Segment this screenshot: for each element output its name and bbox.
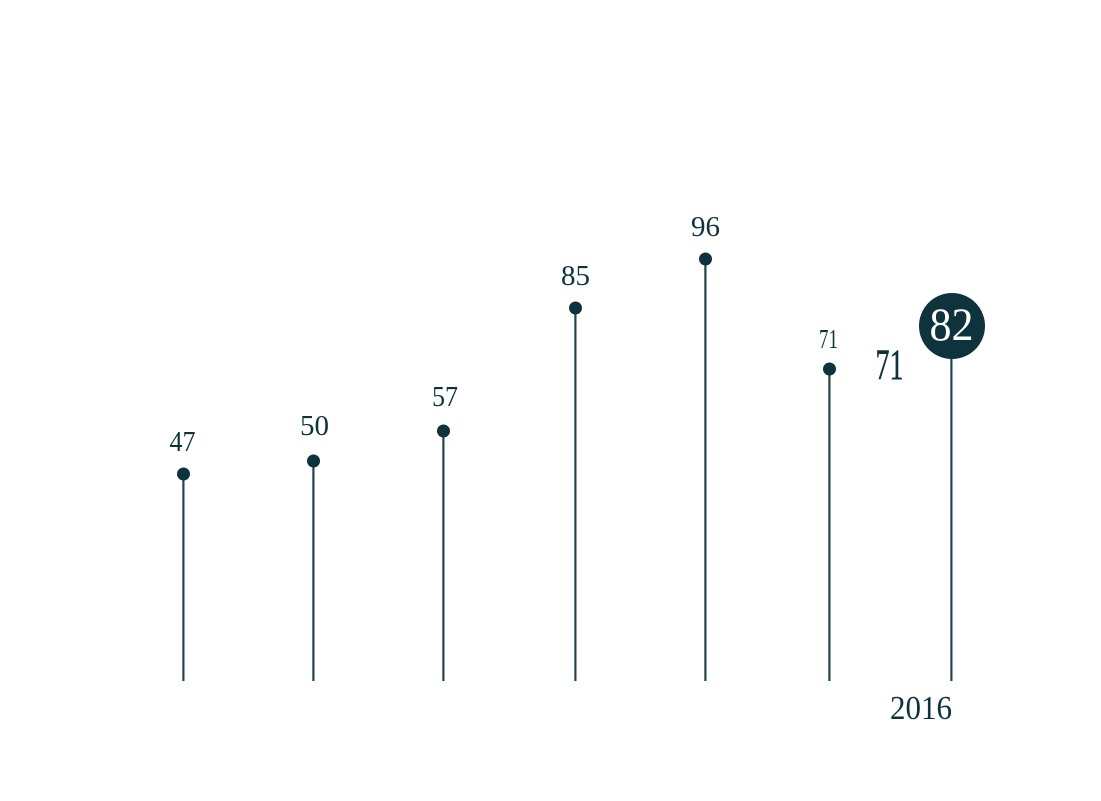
lollipop: value 71: 71 xyxy=(819,324,838,354)
large value label 71: 71 xyxy=(876,342,904,389)
lollipop: value 50: 50 xyxy=(300,411,329,442)
lollipop: value 96 xyxy=(691,212,720,681)
lollipop: value 85: 85 xyxy=(561,261,590,292)
lollipop: value 85 xyxy=(561,261,590,681)
lollipop: value 71 xyxy=(819,324,838,681)
year label: 2016 xyxy=(890,690,952,727)
highlighted lollipop: value 82: 82 xyxy=(930,299,974,351)
lollipop: value 96: 96 xyxy=(691,212,720,243)
lollipop: value 50 xyxy=(300,411,329,681)
highlighted lollipop: value 82 xyxy=(919,293,985,681)
lollipop: value 47: 47 xyxy=(170,427,196,458)
lollipop: value 57: 57 xyxy=(432,382,458,413)
lollipop: value 47 xyxy=(170,427,196,681)
lollipop: value 57 xyxy=(432,382,458,681)
